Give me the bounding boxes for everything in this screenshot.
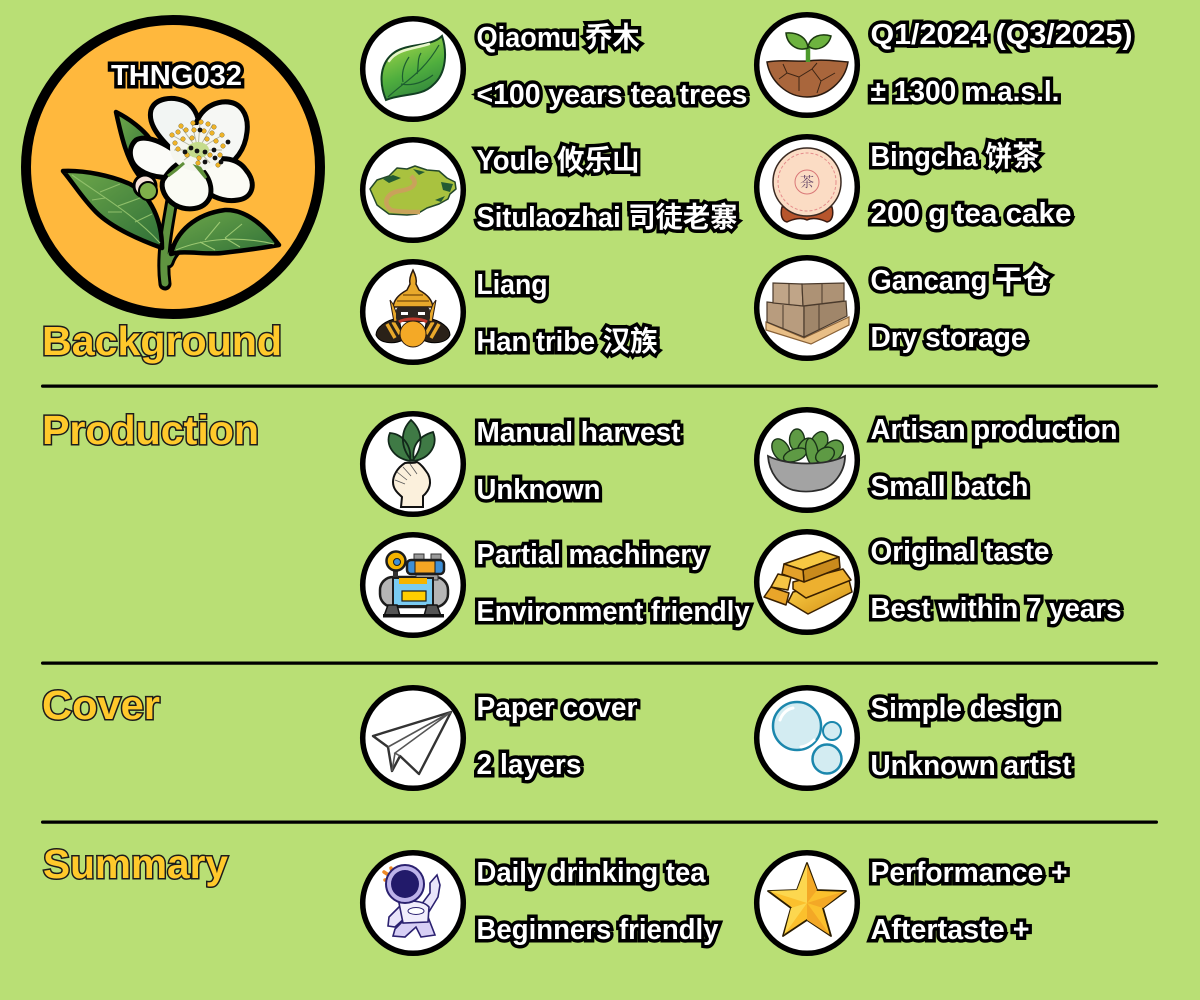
item: tree type <box>363 19 748 119</box>
mouth <box>399 319 427 322</box>
cake stand <box>781 207 833 222</box>
bowl <box>768 456 845 492</box>
icon ring <box>757 15 857 115</box>
icon: hand with leaves <box>363 414 463 514</box>
gauge face <box>394 558 400 566</box>
text: aging: Best within 7 years <box>870 593 1122 625</box>
divider <box>41 384 1158 388</box>
text: Simple design: Simple design <box>870 693 1060 725</box>
burst <box>384 868 393 880</box>
flower centre <box>170 125 224 171</box>
wrapper pattern <box>778 153 836 211</box>
plane folds <box>388 712 451 771</box>
item: taste <box>757 532 1122 632</box>
lower boxes right <box>804 301 847 337</box>
text: Situlaozhai: Situlaozhai 司徒老寨 <box>476 202 738 234</box>
upper left bar <box>771 574 791 590</box>
face <box>396 307 430 322</box>
icon: tea cake <box>757 137 857 237</box>
fist and wrist <box>393 462 430 507</box>
text: layers: 2 layers <box>476 749 582 781</box>
star outline <box>768 863 846 936</box>
legs <box>393 917 435 937</box>
motor caps <box>414 554 441 580</box>
petal left <box>130 138 190 178</box>
motor <box>407 560 444 574</box>
text: Performance: Performance + <box>870 857 1068 889</box>
sepals <box>168 163 206 178</box>
stamen centre <box>187 142 209 158</box>
text: Beginners friendly: Beginners friendly <box>476 914 719 946</box>
icon ring <box>363 535 463 635</box>
lower left bar <box>764 587 789 605</box>
upper boxes <box>773 283 803 306</box>
icon: hillside map <box>363 140 463 240</box>
pallet <box>766 317 849 344</box>
petal top-left <box>150 98 200 150</box>
text: date: Q1/2024 (Q3/2025) <box>870 19 1132 51</box>
gauge <box>386 552 406 570</box>
lower boxes <box>767 302 804 337</box>
leaves in bowl <box>768 429 848 467</box>
middle bar front <box>793 569 851 598</box>
text: Liang: Liang <box>476 269 548 301</box>
text: Environment friendly: Environment friendly <box>476 596 750 628</box>
top bar side <box>782 564 804 582</box>
top bar top face <box>784 551 839 570</box>
icon: paper plane <box>363 688 463 788</box>
ears <box>390 300 436 322</box>
visor <box>391 870 419 898</box>
icon: astronaut <box>363 853 463 953</box>
upper leaf <box>116 112 152 178</box>
tea character: 茶 <box>800 172 814 192</box>
petal top-right <box>194 102 247 170</box>
stamen filaments <box>172 122 224 163</box>
panel: product badge <box>26 20 320 314</box>
petal right <box>196 159 252 201</box>
arms <box>376 318 450 343</box>
base <box>383 614 444 618</box>
text: Manual harvest: Manual harvest <box>476 417 681 449</box>
chest badge <box>408 908 424 914</box>
dark anthers <box>183 128 230 164</box>
illustration: tea flower <box>63 98 279 284</box>
item: production <box>757 410 1118 510</box>
badge circle <box>26 20 320 314</box>
icon ring <box>757 532 857 632</box>
inner ring <box>795 170 819 194</box>
icon ring <box>363 19 463 119</box>
text: Small batch: Small batch <box>870 471 1028 503</box>
icon: machine <box>363 535 463 635</box>
petal bottom <box>162 160 211 209</box>
upper boxes right <box>802 283 844 306</box>
hill base <box>370 166 456 215</box>
cake disc <box>773 148 841 216</box>
heading: Summary: Summary <box>43 841 228 887</box>
river road <box>386 176 420 212</box>
panel <box>402 591 426 601</box>
heading: Background: Background <box>42 318 282 364</box>
left arm <box>388 905 406 927</box>
item: harvest date <box>757 15 1132 115</box>
dark forest patches <box>383 169 453 202</box>
star dark facets <box>807 864 845 935</box>
medium bubble <box>812 744 842 774</box>
left leaf <box>63 171 162 248</box>
petals <box>130 98 252 209</box>
text: Youle: Youle 攸乐山 <box>476 145 640 177</box>
icon: sprout <box>757 15 857 115</box>
icon: star <box>757 853 857 953</box>
icon ring <box>363 262 463 362</box>
bud body <box>139 182 157 200</box>
text: Han tribe: Han tribe 汉族 <box>476 326 658 358</box>
icon: bowl of leaves <box>757 410 857 510</box>
badge code: THNG032 <box>111 60 242 92</box>
text: Unknown artist: Unknown artist <box>870 750 1072 782</box>
helmet <box>386 865 424 903</box>
top plate <box>399 578 427 584</box>
box seams <box>783 284 822 330</box>
text: Original taste: Original taste <box>870 536 1050 568</box>
icon ring <box>757 410 857 510</box>
crown <box>393 270 433 307</box>
text: Bingcha: Bingcha 饼茶 <box>870 141 1040 173</box>
icon ring <box>363 688 463 788</box>
leaf blade <box>382 36 445 100</box>
soil <box>767 60 848 97</box>
left leaf veins <box>72 175 160 243</box>
text: Unknown: Unknown <box>476 474 600 506</box>
text: Paper cover: Paper cover <box>476 692 638 724</box>
icon ring <box>363 853 463 953</box>
tea leaves <box>389 420 435 461</box>
icon ring <box>757 137 857 237</box>
icon ring <box>363 414 463 514</box>
stem <box>164 200 190 284</box>
sprout leaves <box>786 33 831 49</box>
item: cover design <box>757 688 1072 788</box>
finger lines <box>395 464 417 484</box>
sprout stem <box>806 45 810 62</box>
item: shape <box>757 137 1072 237</box>
text: tree age: <100 years tea trees <box>476 79 748 111</box>
item: harvest <box>363 414 681 514</box>
right leaf veins <box>176 222 274 250</box>
body <box>399 901 429 923</box>
gauge post <box>393 569 398 581</box>
anthers <box>170 120 225 167</box>
stem colour <box>164 200 190 283</box>
icon: gold bars <box>757 532 857 632</box>
item: cover material <box>363 688 638 788</box>
item: producer <box>363 262 658 362</box>
divider <box>41 662 1158 665</box>
right leaf <box>171 210 279 254</box>
small bubble <box>823 722 841 740</box>
icon: guardian figure <box>363 262 463 362</box>
divider <box>41 820 1158 824</box>
icon ring <box>757 688 857 788</box>
text: Partial machinery: Partial machinery <box>476 539 707 571</box>
text: Aftertaste: Aftertaste + <box>870 914 1030 946</box>
soil cracks <box>779 63 835 93</box>
icon: boxes on pallet <box>757 258 857 358</box>
blue body <box>393 578 433 606</box>
item: rating <box>757 853 1068 953</box>
motor label <box>415 561 435 573</box>
bottom right bar <box>788 580 852 614</box>
item: storage <box>757 258 1050 358</box>
feet <box>384 605 441 616</box>
item: mountain <box>363 140 738 240</box>
arm gold trim <box>387 322 439 338</box>
bud sepals <box>134 175 156 197</box>
text: Qiaomu: Qiaomu 乔木 <box>476 22 640 54</box>
leaf highlight <box>389 44 429 61</box>
text: Daily drinking tea: Daily drinking tea <box>476 857 707 889</box>
icon: bubbles <box>757 688 857 788</box>
item: tea type <box>363 853 719 953</box>
text: Gancang: Gancang 干仓 <box>870 265 1050 297</box>
icon ring <box>757 853 857 953</box>
plane <box>373 712 451 774</box>
heading: Cover: Cover <box>42 682 160 728</box>
text: Dry storage: Dry storage <box>870 322 1026 354</box>
item: machinery <box>363 535 750 635</box>
top bar front <box>803 557 840 582</box>
large bubble <box>773 702 821 750</box>
icon: leaf <box>363 19 463 119</box>
tanks <box>380 577 448 607</box>
icon ring <box>757 258 857 358</box>
eyes <box>401 312 425 315</box>
text: altitude: ± 1300 m.a.s.l. <box>870 76 1060 108</box>
orange orb <box>400 321 426 347</box>
raised arm <box>421 875 440 915</box>
leaf veins <box>388 45 439 97</box>
bud <box>134 175 157 200</box>
bubble highlights <box>780 708 814 747</box>
crown pattern <box>397 295 429 301</box>
text: cake weight: 200 g tea cake <box>870 198 1072 230</box>
heading: Production: Production <box>42 407 259 453</box>
icon ring <box>363 140 463 240</box>
star light facets <box>769 864 807 935</box>
text: Artisan production: Artisan production <box>870 414 1118 446</box>
